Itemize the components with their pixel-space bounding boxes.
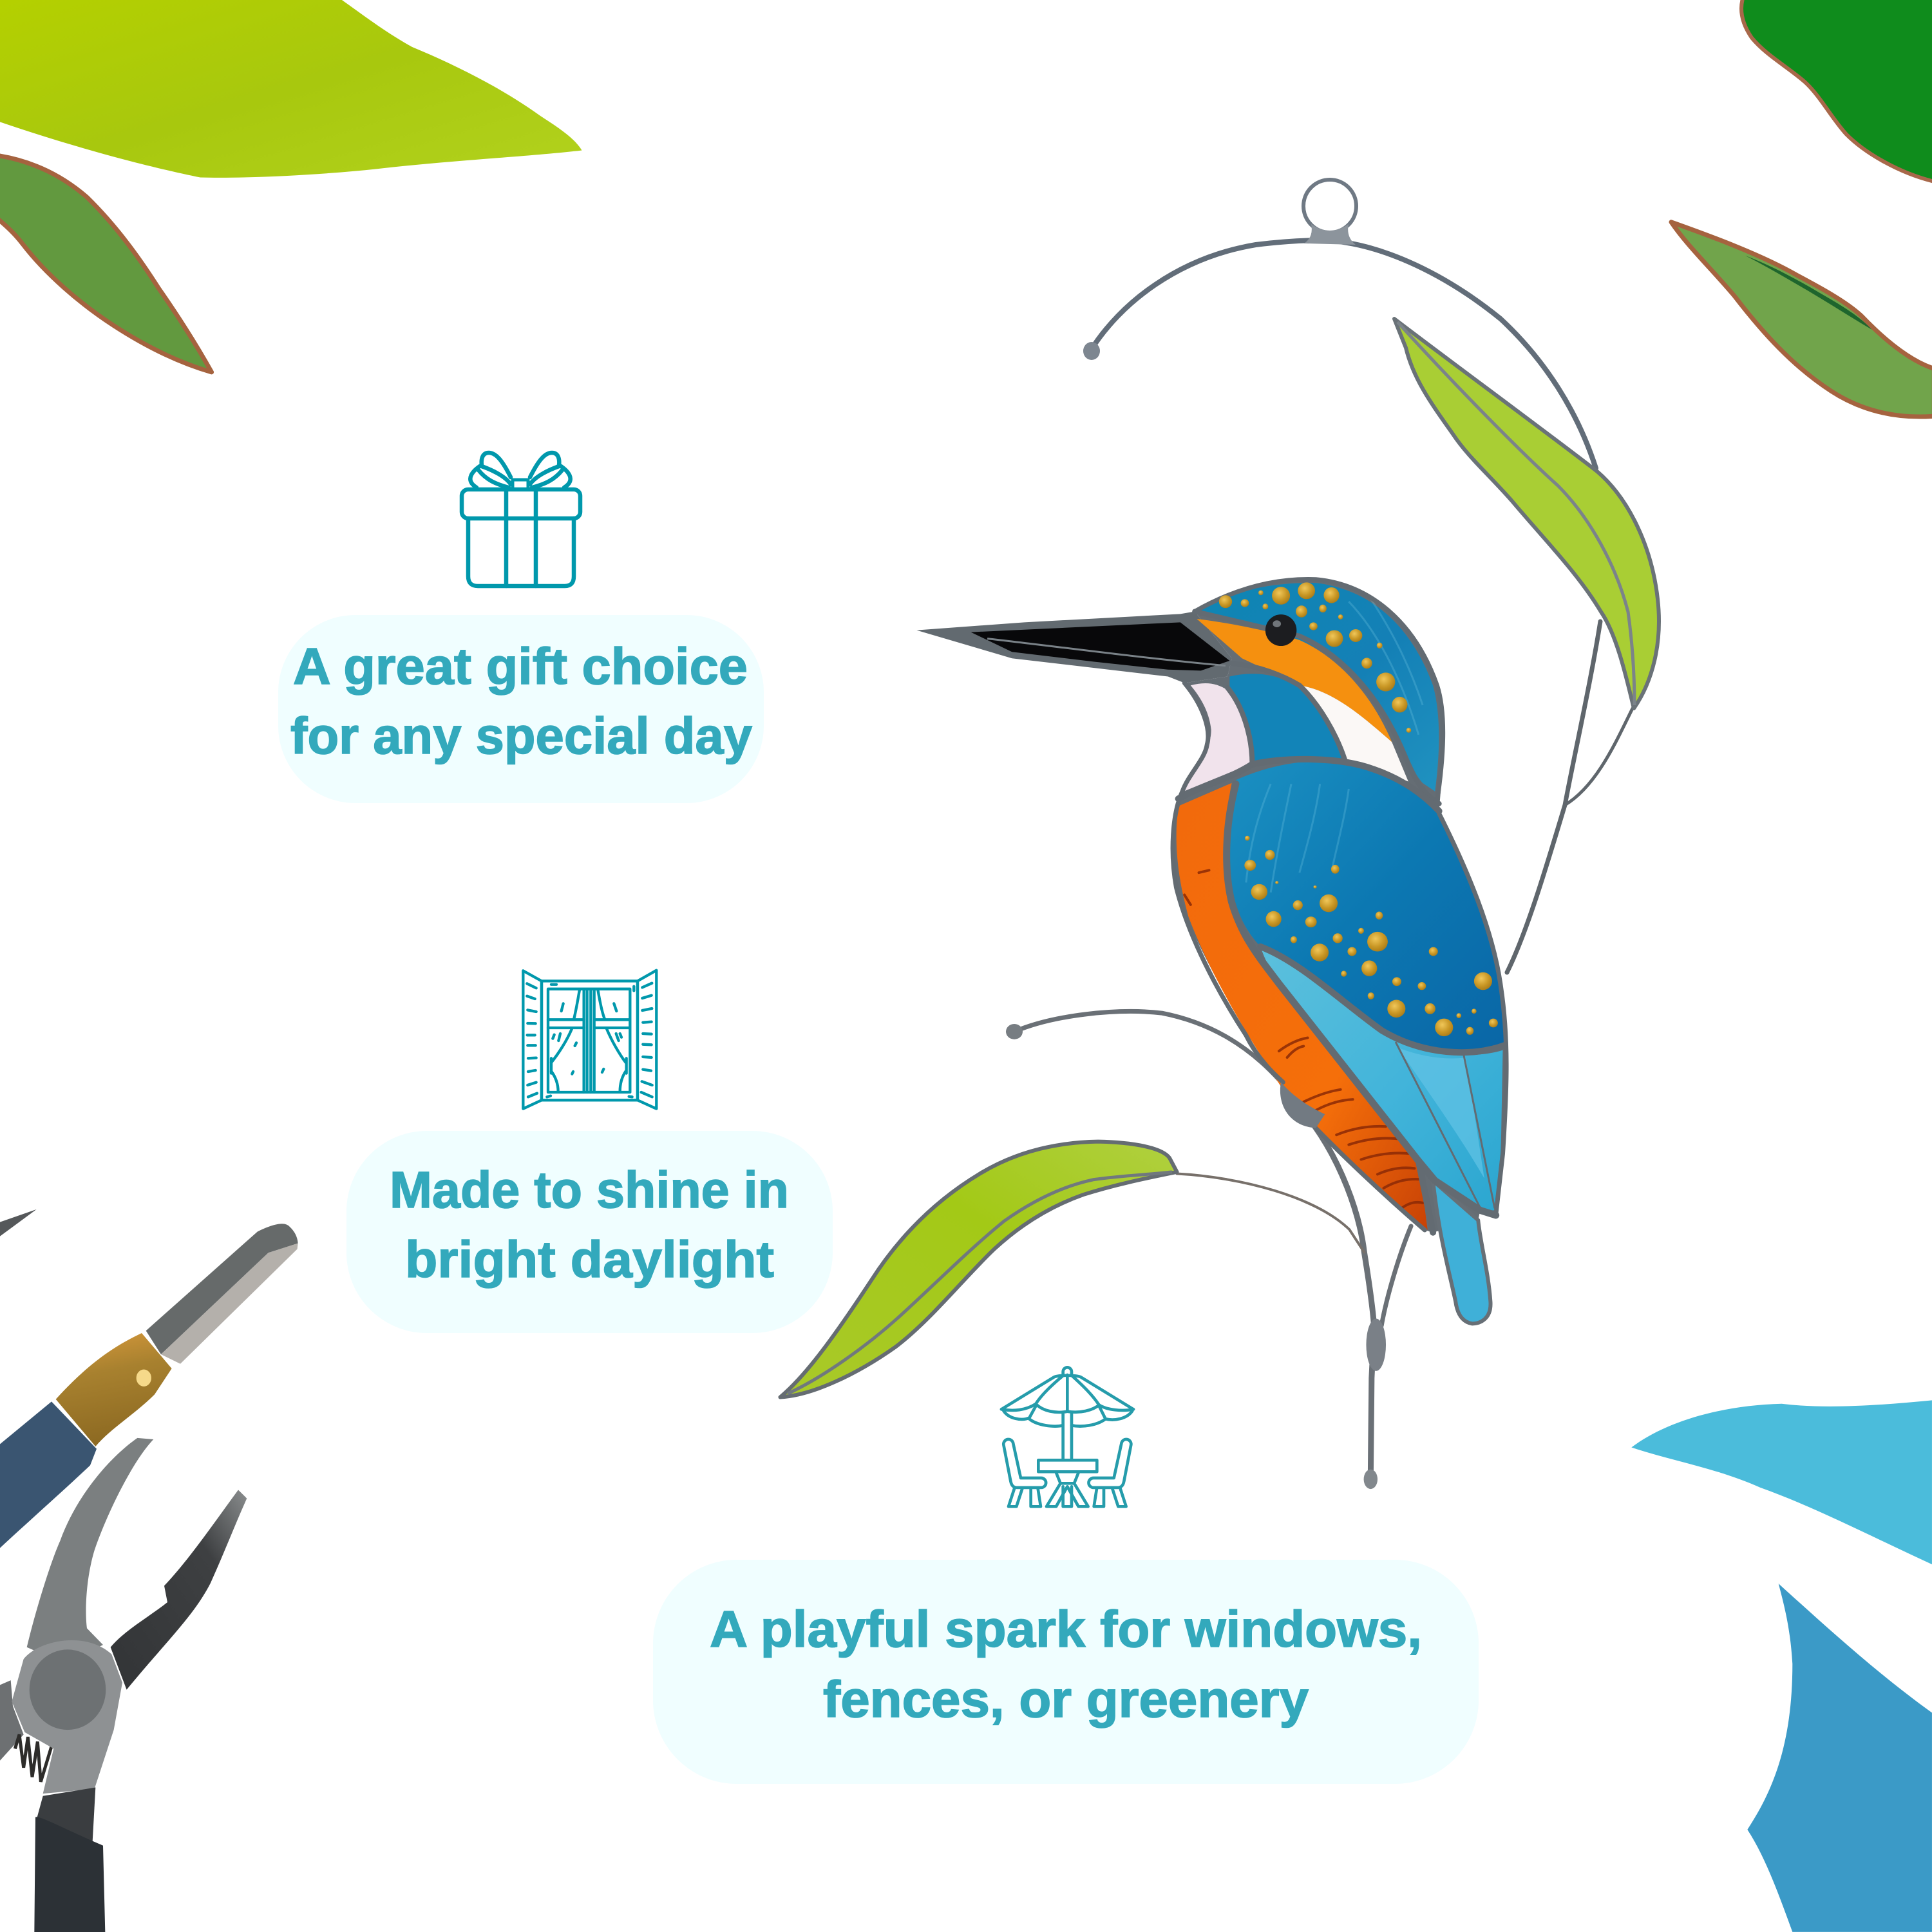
head crown xyxy=(1201,583,1439,791)
main blue back xyxy=(1229,761,1505,1052)
icon: window with shutters xyxy=(523,971,656,1109)
lower green leaf xyxy=(780,1142,1177,1397)
decoration: copper-foiled green leaf, top left xyxy=(0,155,212,372)
icon: gift box xyxy=(462,453,580,586)
light blue wing feathers xyxy=(1260,947,1503,1210)
callout pill: windows, fences, greenery: A playful spark for windows, xyxy=(710,1600,1422,1658)
callout pill: gift xyxy=(278,615,764,803)
callout pill: gift: A great gift choice xyxy=(293,638,748,695)
solder blob on twig xyxy=(1280,1082,1325,1128)
decoration: light blue glass, bottom right xyxy=(1631,1400,1932,1564)
solder backing silhouette xyxy=(1173,580,1506,1233)
orange eye stripe xyxy=(1197,619,1392,742)
glass streaks on back xyxy=(1246,597,1423,893)
decoration: dark blue glass, bottom right xyxy=(1747,1584,1932,1932)
pale throat xyxy=(1184,683,1252,791)
upper stem xyxy=(1507,621,1633,972)
gold dots on back xyxy=(1244,836,1498,1036)
callout pill: windows, fences, greenery: fences, or greenery xyxy=(823,1671,1309,1728)
callout pill: daylight: bright daylight xyxy=(405,1231,774,1288)
gold dots on head xyxy=(1219,582,1411,733)
blue cheek xyxy=(1229,674,1343,762)
icon: patio table with umbrella and chairs xyxy=(1001,1367,1133,1506)
orange belly xyxy=(1177,783,1428,1230)
tool: glass cutter xyxy=(0,1209,298,1548)
callout pill: gift: for any special day xyxy=(290,707,753,764)
hanging wire with loop xyxy=(1083,180,1596,468)
eye xyxy=(1265,614,1296,646)
kingfisher stained glass bird xyxy=(916,580,1506,1323)
lower twigs and stem xyxy=(1006,1012,1411,1489)
tail xyxy=(1433,1180,1491,1323)
solder lead lines xyxy=(1173,580,1506,1233)
tool: pliers xyxy=(0,1438,247,1932)
callout pill: daylight xyxy=(346,1131,833,1333)
beak xyxy=(916,611,1232,683)
white neck patch xyxy=(1300,685,1408,782)
decoration: lime glass shard xyxy=(0,0,582,178)
upper green leaf xyxy=(1394,319,1659,708)
belly glass streaks xyxy=(1184,870,1423,1208)
decoration: dark green glass, top right xyxy=(1741,0,1932,182)
callout pill: windows, fences, greenery xyxy=(653,1560,1479,1784)
decoration: copper-foiled green leaf, right xyxy=(1671,222,1932,417)
callout pill: daylight: Made to shine in xyxy=(390,1161,789,1218)
